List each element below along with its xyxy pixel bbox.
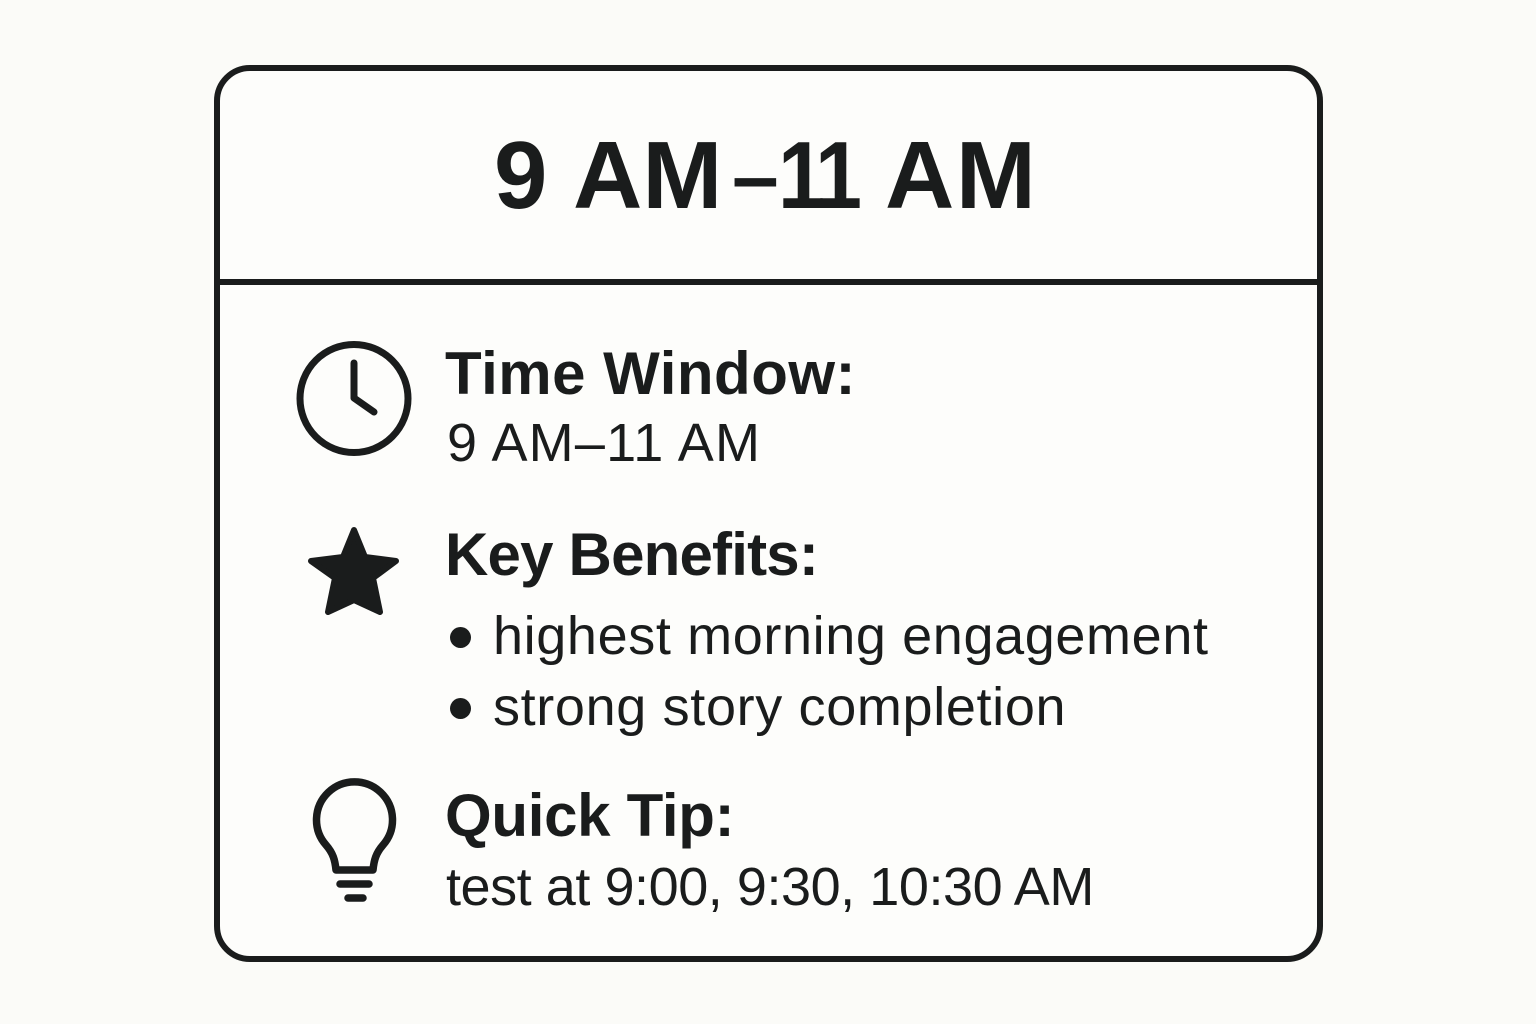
header divider [218, 279, 1318, 285]
benefit 1: highest morning engagement [493, 606, 1209, 666]
list: benefits [450, 606, 1209, 737]
title: AM [573, 122, 722, 229]
heading: key benefits: Key Benefits: [445, 521, 818, 588]
benefit 2: strong story completion [493, 677, 1066, 737]
text: quick tip: test at 9:00, 9:30, 10:30 AM [446, 857, 1094, 917]
icon: clock [296, 341, 412, 456]
title: AM [885, 122, 1037, 229]
title: – [732, 129, 779, 223]
heading: quick tip: Quick Tip: [445, 782, 734, 849]
icon: light bulb [312, 778, 396, 902]
title [494, 122, 1037, 229]
title: 9 [494, 122, 547, 229]
title: 11 [778, 122, 857, 229]
bullet 2 [450, 698, 471, 719]
text: time window: 9 AM–11 AM [447, 413, 761, 473]
panel: card [214, 65, 1323, 962]
heading: time window: Time Window: [445, 340, 856, 407]
icon: star [308, 527, 399, 615]
bullet 1 [450, 627, 471, 648]
